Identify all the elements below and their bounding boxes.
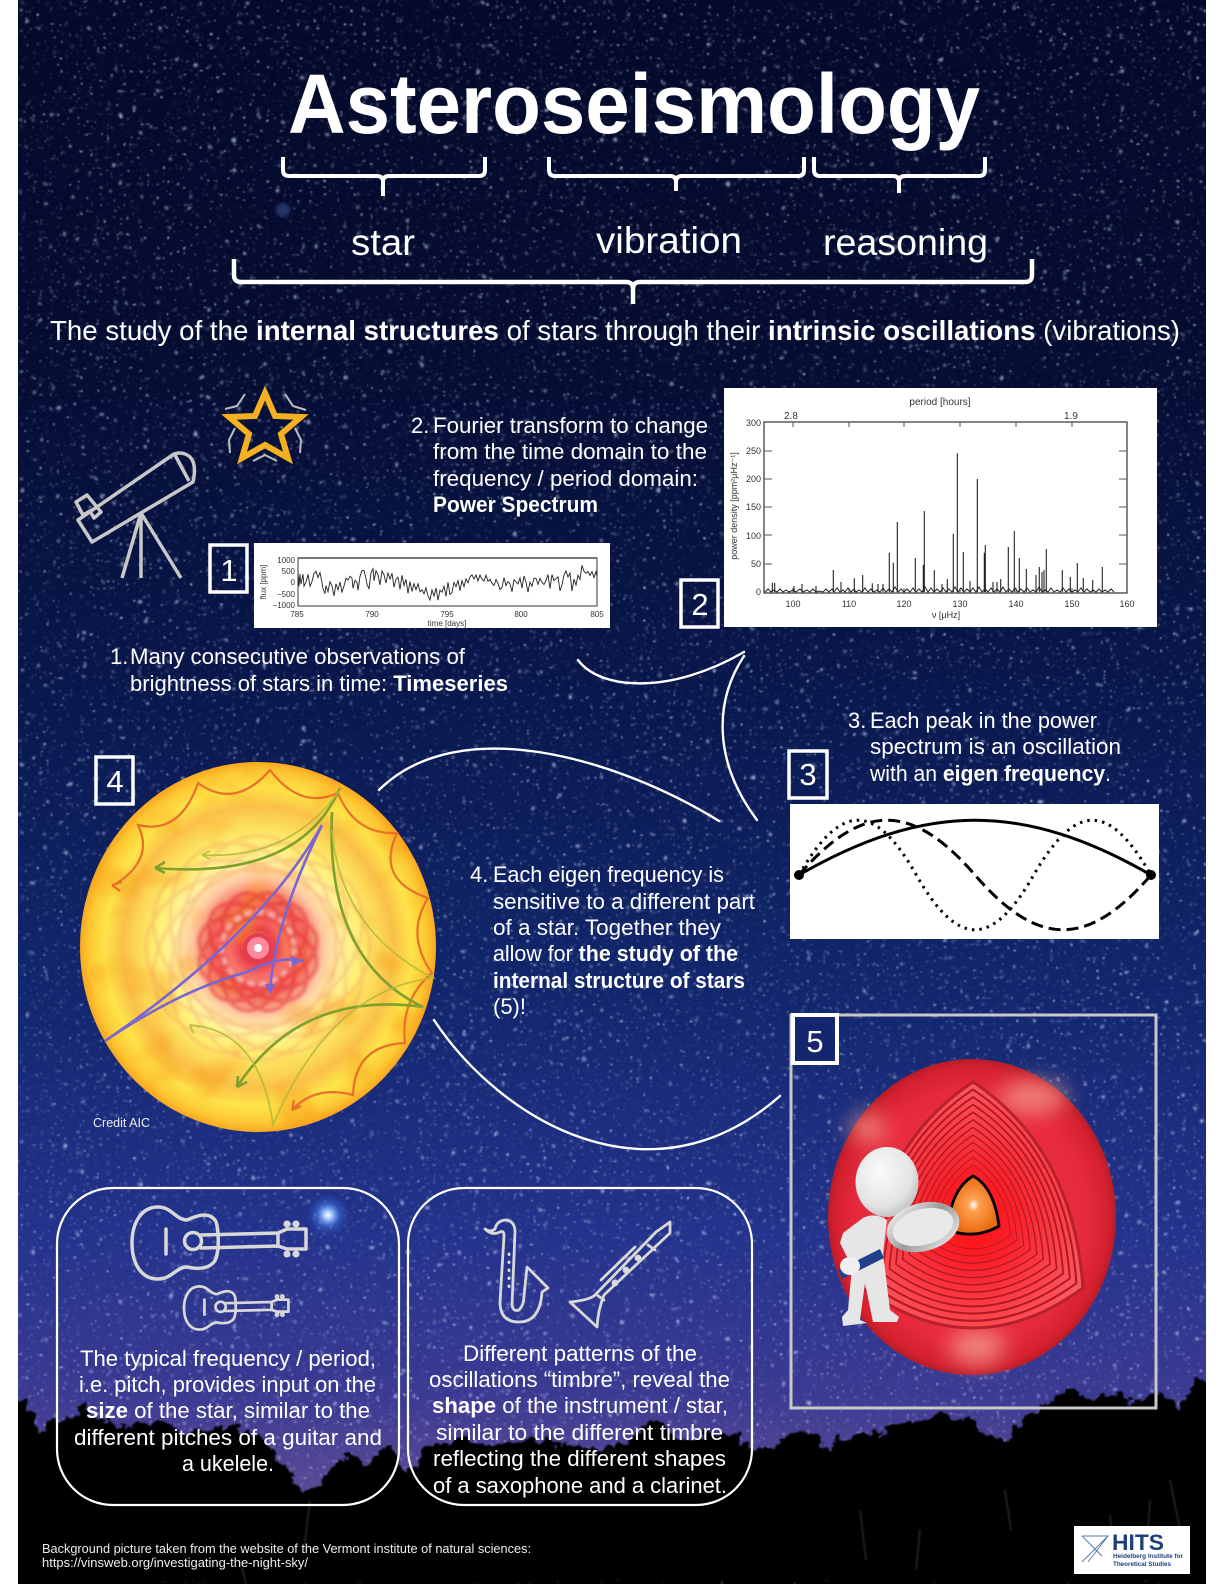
chart: power spectrum (724, 388, 1157, 627)
chart: power spectrum: 300 (746, 418, 761, 428)
star cross section with ray paths (80, 762, 436, 1132)
step 1 text (110, 644, 508, 696)
core of star (243, 933, 273, 963)
chart: power spectrum: 150 (1064, 599, 1080, 609)
chart: timeseries: −1000 (273, 601, 296, 610)
chart: power spectrum: 110 (842, 599, 856, 609)
reuleaux shell rings (863, 1082, 1083, 1328)
orange core (948, 1176, 999, 1234)
box label 1 (210, 545, 247, 592)
panel text: wind instruments: shape of the instrument / star, (432, 1393, 728, 1418)
chart: power spectrum: 100 (785, 599, 801, 609)
step 4 text: sensitive to a different part (493, 889, 755, 914)
step 3 text: Each peak in the power (870, 708, 1097, 733)
chart: power spectrum: 50 (751, 559, 761, 569)
panel text: wind instruments: oscillations “timbre”, reveal the (429, 1367, 730, 1392)
panel text: guitar (74, 1346, 382, 1476)
chart: power spectrum: period [hours] (909, 397, 971, 408)
chart: power spectrum: 140 (1008, 599, 1024, 609)
brace: seismo (549, 157, 804, 191)
panel text: wind instruments: similar to the different timbre (436, 1420, 723, 1445)
panel text: guitar: different pitches of a guitar and (74, 1425, 382, 1450)
panel text: wind instruments: reflecting the different shapes (433, 1446, 726, 1471)
orange p-mode rays (112, 770, 432, 1110)
chart: timeseries: time [days] (428, 619, 466, 628)
box label 1: 1 (220, 553, 238, 588)
blue arrow heads (265, 956, 303, 995)
logo: HITS: Theoretical Studies (1113, 1562, 1172, 1568)
panel text: guitar: The typical frequency / period, (80, 1346, 376, 1371)
step 2 text: from the time domain to the (433, 439, 707, 464)
step 2 text: frequency / period domain: (433, 466, 698, 491)
step 2 text: 2. (411, 413, 429, 438)
icon: guitar (132, 1207, 306, 1279)
box label 5: 5 (806, 1024, 824, 1059)
logo: HITS (1074, 1526, 1190, 1574)
footer credit: https://vinsweb.org/investigating-the-night-sky/ (42, 1556, 309, 1570)
box label 5 (793, 1015, 837, 1063)
panel text: guitar: a ukelele. (182, 1451, 274, 1476)
word: vibration: vibration (596, 220, 742, 261)
box label 4: 4 (106, 764, 124, 799)
faint streaks in trees (240, 1480, 1180, 1584)
word: reasoning: reasoning (823, 222, 988, 263)
ring pattern (122, 812, 394, 1084)
icon: star (225, 393, 306, 461)
step 3 text: 3. (848, 708, 866, 733)
step 3 text: spectrum is an oscillation (870, 734, 1121, 759)
chart: power spectrum: 0 (756, 587, 761, 597)
box label 4 (96, 757, 133, 804)
chart: timeseries: 800 (514, 610, 528, 619)
chart: timeseries: 790 (365, 610, 379, 619)
step 4 text: of a star. Together they (493, 915, 721, 940)
step 2 text (411, 413, 708, 517)
chart: power spectrum: 1.9 (1064, 411, 1078, 422)
panel 5: frame (791, 1015, 1156, 1408)
footer credit (42, 1542, 531, 1570)
icon: telescope (76, 453, 194, 578)
step 4 text: internal structure of stars (493, 968, 745, 993)
credit: Credit AIC (93, 1115, 150, 1130)
step 1 text: brightness of stars in time: Timeseries (130, 671, 508, 696)
panel text: guitar: size of the star, similar to the (86, 1398, 370, 1423)
step 4 text: 4. (470, 862, 488, 887)
box label 3 (789, 751, 827, 798)
chart: timeseries: −500 (277, 590, 296, 599)
box label 3: 3 (799, 757, 817, 792)
step 3 text (848, 708, 1121, 786)
arrow: curve from timeseries to spectrum (578, 652, 744, 683)
chart: power spectrum: ν [μHz] (932, 610, 960, 620)
blue rays (105, 825, 322, 1041)
step 2 text: Fourier transform to change (433, 413, 708, 438)
panel text: guitar: i.e. pitch, provides input on the (79, 1372, 376, 1397)
step 3 text: with an eigen frequency. (869, 761, 1111, 786)
chart: timeseries: 0 (291, 578, 296, 587)
step 4 text (470, 862, 755, 1019)
pale green rays (190, 790, 433, 1125)
arrow: curve from step 4 to step 5 (434, 1020, 780, 1149)
chart: power spectrum: 150 (746, 502, 761, 512)
step 1 text: Many consecutive observations of (130, 644, 466, 669)
step 2 text: Power Spectrum (433, 492, 598, 517)
chart: power spectrum: 160 (1119, 599, 1135, 609)
chart: timeseries: 1000 (277, 556, 296, 565)
panel: shape / wind instruments (408, 1188, 752, 1505)
icon: ukulele (184, 1286, 288, 1330)
title: Asteroseismology (288, 57, 980, 151)
arrow: curve from spectrum to eigenmode (723, 656, 757, 820)
figure with magnifying glass (838, 1147, 961, 1326)
logo: HITS: Heidelberg Institute for (1113, 1554, 1184, 1560)
chart: power spectrum: power density [ppm²μHz⁻¹] (729, 452, 739, 560)
step 4 text: allow for the study of the (493, 941, 738, 966)
logo: HITS: HITS (1112, 1530, 1164, 1555)
chart: power spectrum: 250 (746, 446, 761, 456)
subtitle definition: The study of the internal structures of stars through their intrinsic oscillations (vibrations) (50, 315, 1180, 346)
chart: power spectrum: 200 (746, 474, 761, 484)
chart: power spectrum: 100 (746, 531, 761, 541)
chart: power spectrum: 130 (952, 599, 968, 609)
chart: timeseries: 795 (440, 610, 454, 619)
chart: standing wave modes (790, 804, 1159, 939)
step 1 text: 1. (110, 644, 128, 669)
brace: aster (283, 157, 485, 196)
panel text: wind instruments: Different patterns of the (463, 1341, 697, 1366)
chart: timeseries: 785 (290, 610, 304, 619)
footer credit: Background picture taken from the website of the Vermont institute of natural sciences: (42, 1542, 531, 1556)
step 4 text: (5)! (493, 994, 526, 1019)
box label 2: 2 (691, 587, 709, 622)
box label 2 (681, 580, 718, 627)
word: star: star (351, 222, 415, 263)
panel text: wind instruments: of a saxophone and a clarinet. (433, 1473, 727, 1498)
green rays (155, 788, 423, 1087)
brace: whole word (234, 259, 1032, 304)
panel: size / guitar (57, 1188, 399, 1505)
chart: power spectrum: 120 (896, 599, 912, 609)
arrow: curve from eigenmode to star (379, 749, 719, 821)
step 4 text: Each eigen frequency is (493, 862, 724, 887)
chart: timeseries (254, 543, 636, 628)
chart: timeseries: 500 (282, 567, 296, 576)
chart: power spectrum: 2.8 (784, 411, 798, 422)
tree silhouette (0, 1377, 1224, 1584)
icon: clarinet (570, 1222, 670, 1327)
brace: logy (814, 157, 985, 193)
star interior model (828, 1059, 1116, 1375)
chart: timeseries: 805 (590, 610, 604, 619)
chart: timeseries: flux [ppm] (259, 565, 268, 599)
icon: saxophone (485, 1220, 548, 1322)
panel text: wind instruments (429, 1341, 730, 1498)
